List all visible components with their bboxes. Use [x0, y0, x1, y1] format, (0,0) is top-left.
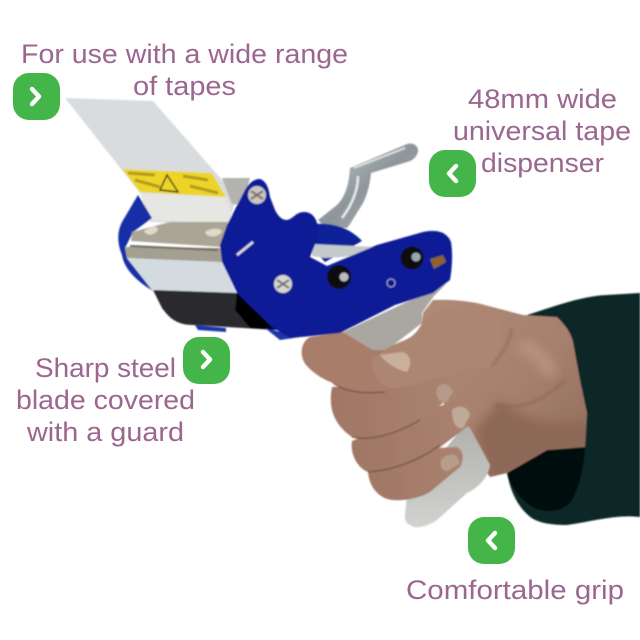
callout: comfortable grip: Comfortable grip [406, 575, 624, 605]
callout: steel blade: Sharp steel [35, 353, 176, 383]
grip handle lower [405, 425, 490, 527]
tape roll [153, 290, 277, 330]
badge [430, 255, 446, 269]
callout: steel blade: with a guard [26, 417, 184, 447]
palm [420, 300, 590, 482]
guard plate [127, 258, 237, 294]
icon: chevron left button [468, 517, 515, 564]
callout: range of tapes [13, 39, 348, 120]
back wheel [305, 224, 362, 262]
sleeve [507, 293, 640, 525]
callout: steel blade [16, 337, 230, 447]
callout: tape dispenser width: universal tape [453, 116, 631, 146]
knob left [327, 265, 351, 289]
callout: tape dispenser width [429, 84, 631, 197]
grip handle upper [343, 283, 447, 350]
icon: chevron right button [183, 337, 230, 384]
fingers [302, 304, 502, 500]
blade mount [125, 222, 228, 263]
photo: hand holding tape dispenser [65, 98, 640, 527]
callout: tape dispenser width: dispenser [481, 148, 604, 178]
left side plate [118, 195, 153, 291]
lower clip [195, 325, 300, 340]
screw top [248, 186, 266, 204]
screw bottom [274, 275, 292, 293]
knob right [400, 246, 424, 270]
caution label [122, 169, 226, 197]
lever handle [318, 144, 418, 228]
callout: tape dispenser width: 48mm wide [468, 84, 617, 114]
icon: chevron right button [13, 73, 60, 120]
callout: range of tapes: of tapes [133, 71, 236, 101]
tape sheet [65, 98, 250, 224]
spring [312, 244, 378, 258]
callout: comfortable grip [406, 517, 624, 605]
callout: range of tapes: For use with a wide range [21, 39, 348, 69]
callout: steel blade: blade covered [16, 385, 195, 415]
icon: chevron left button [429, 150, 476, 197]
blue front plate [220, 179, 452, 338]
